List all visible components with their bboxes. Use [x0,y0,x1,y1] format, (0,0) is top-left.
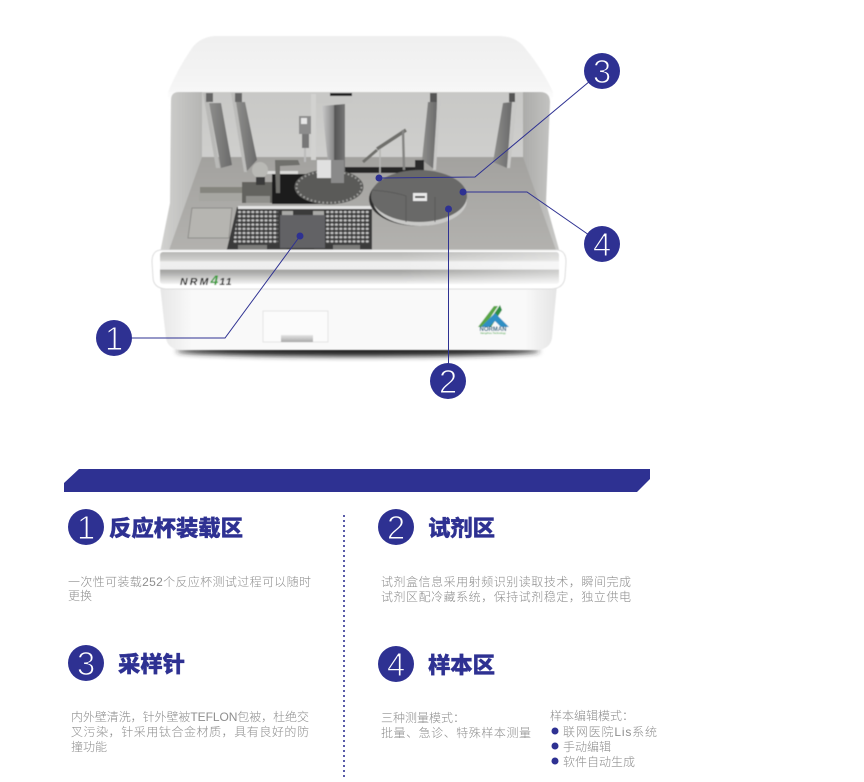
badge 3: 3 [77,645,95,682]
sample editing modes: 联网医院Lis系统 [563,724,657,739]
norman logo [478,305,509,335]
callout 4 [460,188,620,263]
sample editing modes: 样本编辑模式： [550,709,634,723]
reaction cup carousel [294,160,364,204]
callout 4: 4 [593,226,611,263]
description: 内外壁清洗，针外壁被TEFLON包被，杜绝交 [71,709,309,724]
front door [263,311,328,342]
sampling needle [275,116,311,193]
callout 2: 2 [439,363,457,400]
badge 4: 4 [387,646,405,683]
callout 3 [376,53,620,182]
callout 1: 1 [105,320,123,357]
panel: 采样针 [68,645,309,754]
dark wells behind deck [258,160,424,204]
interior back wall [202,92,523,158]
right wash posts [422,93,518,170]
badge 4 [378,646,414,683]
sample editing modes: 软件自动生成 [563,755,635,769]
sample editing modes: 手动编辑 [563,740,611,754]
reagent disc [369,170,467,226]
analyzer machine illustration [152,36,566,356]
panel: 试剂区 [378,509,631,604]
heading 试剂区: 试剂区 [428,516,495,541]
header banner [64,469,650,492]
description: 试剂盒信息采用射频识别读取技术，瞬间完成 [381,574,631,589]
heading 反应杯装载区: 反应杯装载区 [109,515,243,541]
badge 1 [68,509,104,546]
left wash posts [203,93,257,172]
callout 3: 3 [593,53,611,90]
sample editing modes [550,709,657,769]
badge 2 [378,509,414,546]
norman logo: Hangzhou Technology [480,331,507,335]
interior right wall [520,92,560,253]
measurement modes: 三种测量模式： [381,711,465,725]
sample rack tray [226,206,372,253]
description: 一次性可装载252个反应杯测试过程可以随时 [68,575,311,589]
description: 试剂区配冷藏系统，保持试剂稳定，独立供电 [381,590,631,604]
reagent arms [363,130,406,173]
heading 采样针: 采样针 [118,652,185,677]
machine hood [168,36,553,100]
norman logo: NORMAN [480,327,506,333]
heading 样本区: 样本区 [428,653,495,678]
badge 3 [68,645,104,682]
measurement modes: 批量、急诊、特殊样本测量 [381,726,531,740]
deck pad [188,208,232,238]
machine lower body [160,285,557,350]
panel: 样本区 [378,646,657,769]
model name: NRM411 [180,272,233,288]
front strip [152,250,566,289]
interior left wall [160,92,204,253]
description: 撞功能 [71,739,107,754]
badge 1: 1 [77,509,95,546]
deck floor [168,157,557,253]
description: 更换 [68,589,92,603]
centre gantry column [311,93,352,182]
badge 2: 2 [387,509,405,546]
panel: 反应杯装载区 [68,509,311,603]
callout 1 [96,232,304,357]
left sample block [199,162,272,203]
callout 2 [430,206,466,400]
description: 叉污染，针采用钛合金材质，具有良好的防 [71,724,309,739]
